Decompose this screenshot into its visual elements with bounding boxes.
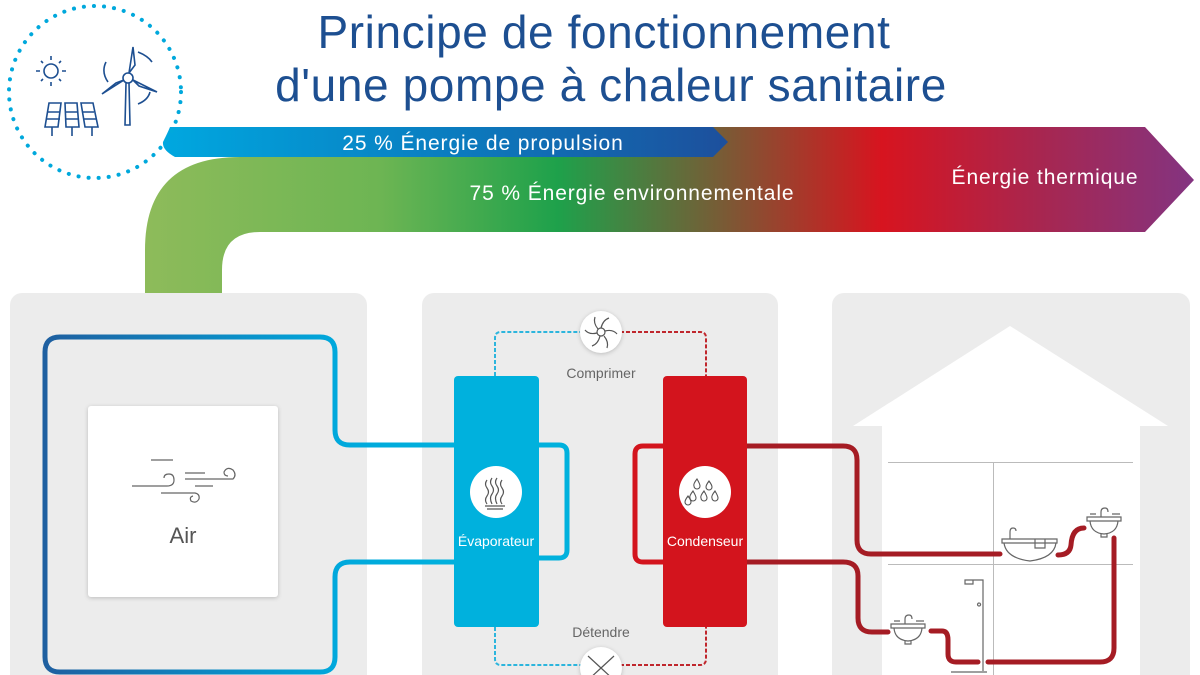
condenser (663, 376, 747, 627)
title: d'une pompe à chaleur sanitaire (275, 59, 947, 111)
evaporator: Évaporateur (458, 533, 534, 549)
icon: renewable energy circle (9, 6, 181, 178)
house (853, 326, 1168, 675)
box: air: Air (170, 523, 196, 548)
icon: lower sink (891, 615, 925, 644)
hot water pipes (747, 446, 1114, 662)
icon: droplets (685, 479, 718, 505)
condenser: Condenseur (667, 533, 743, 549)
condenser loop (635, 446, 663, 562)
evaporator (454, 376, 539, 627)
title: Principe de fonctionnement (317, 6, 891, 58)
icon: expansion valve (580, 647, 622, 675)
panel: heat pump (422, 293, 778, 675)
pipe loop: air side (45, 337, 460, 672)
arrow label: thermal energy: Énergie thermique (952, 166, 1138, 189)
arrow: propulsion energy: 25 % Énergie de propulsion (342, 132, 624, 155)
panel: outside air (10, 293, 367, 675)
evaporator loop (539, 445, 567, 558)
arrow: thermal energy (145, 127, 1194, 293)
icon: compressor fan (580, 311, 622, 353)
dashed refrigerant loop (495, 332, 706, 665)
panel: house (832, 293, 1190, 675)
icon: bathtub (1002, 528, 1057, 561)
label: compress: Comprimer (566, 365, 636, 381)
title (275, 6, 947, 111)
icon: shower (951, 580, 987, 672)
icon: upper sink (1087, 508, 1121, 537)
label: expand: Détendre (572, 624, 630, 640)
icon: wind (132, 460, 235, 502)
arrow label: environmental energy: 75 % Énergie environnementale (470, 182, 794, 205)
box: air (88, 406, 278, 597)
arrow: propulsion energy (163, 127, 728, 157)
icon: heat waves (485, 478, 505, 509)
